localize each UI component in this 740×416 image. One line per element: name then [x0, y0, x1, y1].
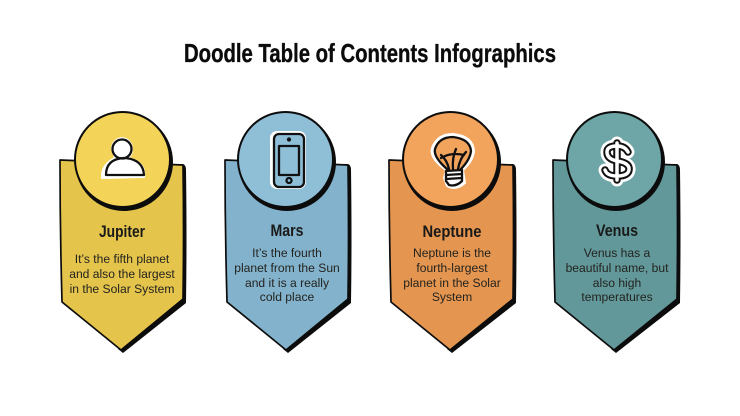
- text: Mars: cold place: [260, 290, 314, 304]
- icon: dollar sign: [605, 143, 629, 180]
- text: Jupiter: [69, 252, 175, 296]
- badge: Mars: [238, 112, 336, 211]
- heading: Jupiter: Jupiter: [99, 223, 145, 241]
- text: Jupiter: and also the largest: [69, 267, 175, 281]
- text: Venus: also high: [593, 276, 641, 290]
- heading: Neptune: Neptune: [422, 223, 482, 241]
- text: Neptune: fourth-largest: [416, 261, 488, 275]
- text: Venus: Venus has a: [584, 246, 651, 260]
- text: Venus: [566, 246, 669, 304]
- badge: Jupiter: [75, 112, 173, 211]
- icon: person: [102, 138, 144, 178]
- text: Venus: temperatures: [581, 290, 653, 304]
- banner: Venus: [553, 160, 680, 353]
- heading: Mars: Mars: [270, 222, 304, 240]
- text: Jupiter: in the Solar System: [70, 282, 174, 296]
- title: Doodle Table of Contents Infographics: [184, 38, 556, 68]
- heading: Venus: Venus: [596, 222, 638, 240]
- badge: Neptune: [403, 112, 501, 211]
- panel: Neptune: [389, 112, 516, 353]
- text: Mars: It’s the fourth: [252, 246, 322, 260]
- text: Mars: [234, 246, 340, 304]
- text: Neptune: Neptune is the: [413, 246, 491, 260]
- panel: Mars: [225, 112, 352, 353]
- text: Neptune: System: [432, 290, 472, 304]
- text: Neptune: [403, 246, 501, 304]
- panel: Jupiter: [60, 112, 186, 353]
- badge: Venus: [567, 112, 665, 211]
- text: Neptune: planet in the Solar: [403, 276, 501, 290]
- banner: Neptune: [389, 160, 516, 353]
- text: Mars: planet from the Sun: [234, 261, 340, 275]
- text: Mars: and it is a really: [245, 276, 330, 290]
- banner: Jupiter: [60, 160, 186, 353]
- banner: Mars: [225, 160, 352, 353]
- text: Jupiter: It’s the fifth planet: [75, 252, 170, 266]
- icon: light bulb: [432, 134, 474, 188]
- panel: Venus: [553, 112, 680, 353]
- icon: phone: [270, 131, 306, 189]
- text: Venus: beautiful name, but: [566, 261, 669, 275]
